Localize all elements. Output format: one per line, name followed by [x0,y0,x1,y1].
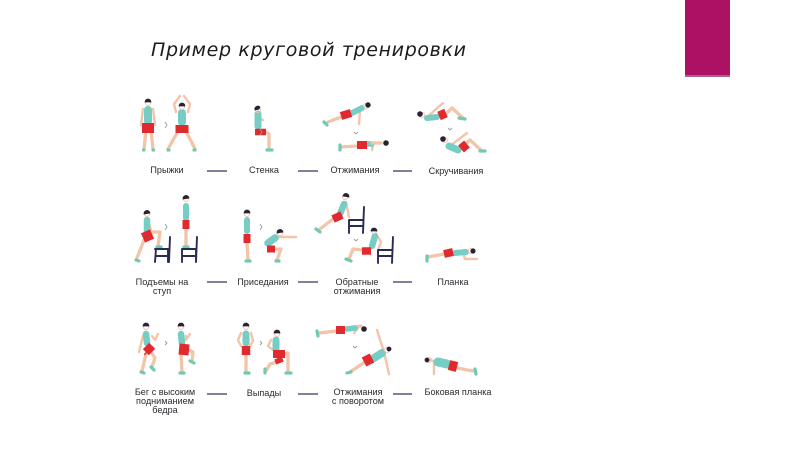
row 2 labels: Планка [437,277,470,287]
figure: lunge standing [238,323,253,373]
figure: high knees one [139,323,158,373]
icon: chair three [349,207,364,233]
figure: squat standing [244,210,250,261]
row 1 labels: Прыжки [150,165,184,175]
row 2 labels: ступ [153,286,171,296]
row 1 labels: Скручивания [429,166,483,176]
figure: lunge low [265,330,291,373]
row 2 labels: Обратные [336,277,378,287]
row 1 labels: Стенка [249,165,280,175]
arrows between exercises [207,171,412,394]
figure: crunch down [441,133,485,151]
figure: jumps standing [141,99,155,150]
row 1 labels: Отжимания [330,165,380,175]
icon: chair four [378,237,393,263]
figure: jumps open [168,96,195,150]
figure: rotating push-up high [347,330,391,374]
exercise chart [135,96,492,415]
row 3 labels: Отжимания [333,387,383,397]
icon: chair two [182,237,197,262]
row 3 labels: Боковая планка [425,387,492,397]
row 2 labels: отжимания [334,286,380,296]
figure: high knees two [178,323,194,373]
title: Пример круговой тренировки [151,39,466,61]
figure: wall sit [255,106,272,150]
row 2 labels [136,277,470,296]
figure: push-up high [324,103,370,125]
row 2 labels: Приседания [237,277,289,287]
figure: step-up standing [183,195,189,247]
row 3 labels: подниманием [136,396,194,406]
row 3 labels: Выпады [247,388,281,398]
figure: push-up low [340,141,388,150]
between-step chevrons [165,122,452,348]
row 3 labels: бедра [152,405,179,415]
figure: crunch up [418,103,465,119]
row 1 labels [150,165,483,176]
figure: dip bottom [346,228,381,261]
figure: rotating push-up low [317,326,366,336]
figure: plank [427,248,477,261]
figure: squat low [267,229,296,261]
row 3 labels: Бег с высоким [135,387,195,397]
icon: chair one [155,237,170,262]
row 2 labels: Подъемы на [136,277,189,287]
row 3 labels [135,387,492,415]
pink corner decoration [685,0,730,77]
figure: step-up bent knee [136,210,161,261]
figure: side plank [425,358,476,374]
row 3 labels: с поворотом [332,396,384,406]
figure: dip top [316,193,349,232]
